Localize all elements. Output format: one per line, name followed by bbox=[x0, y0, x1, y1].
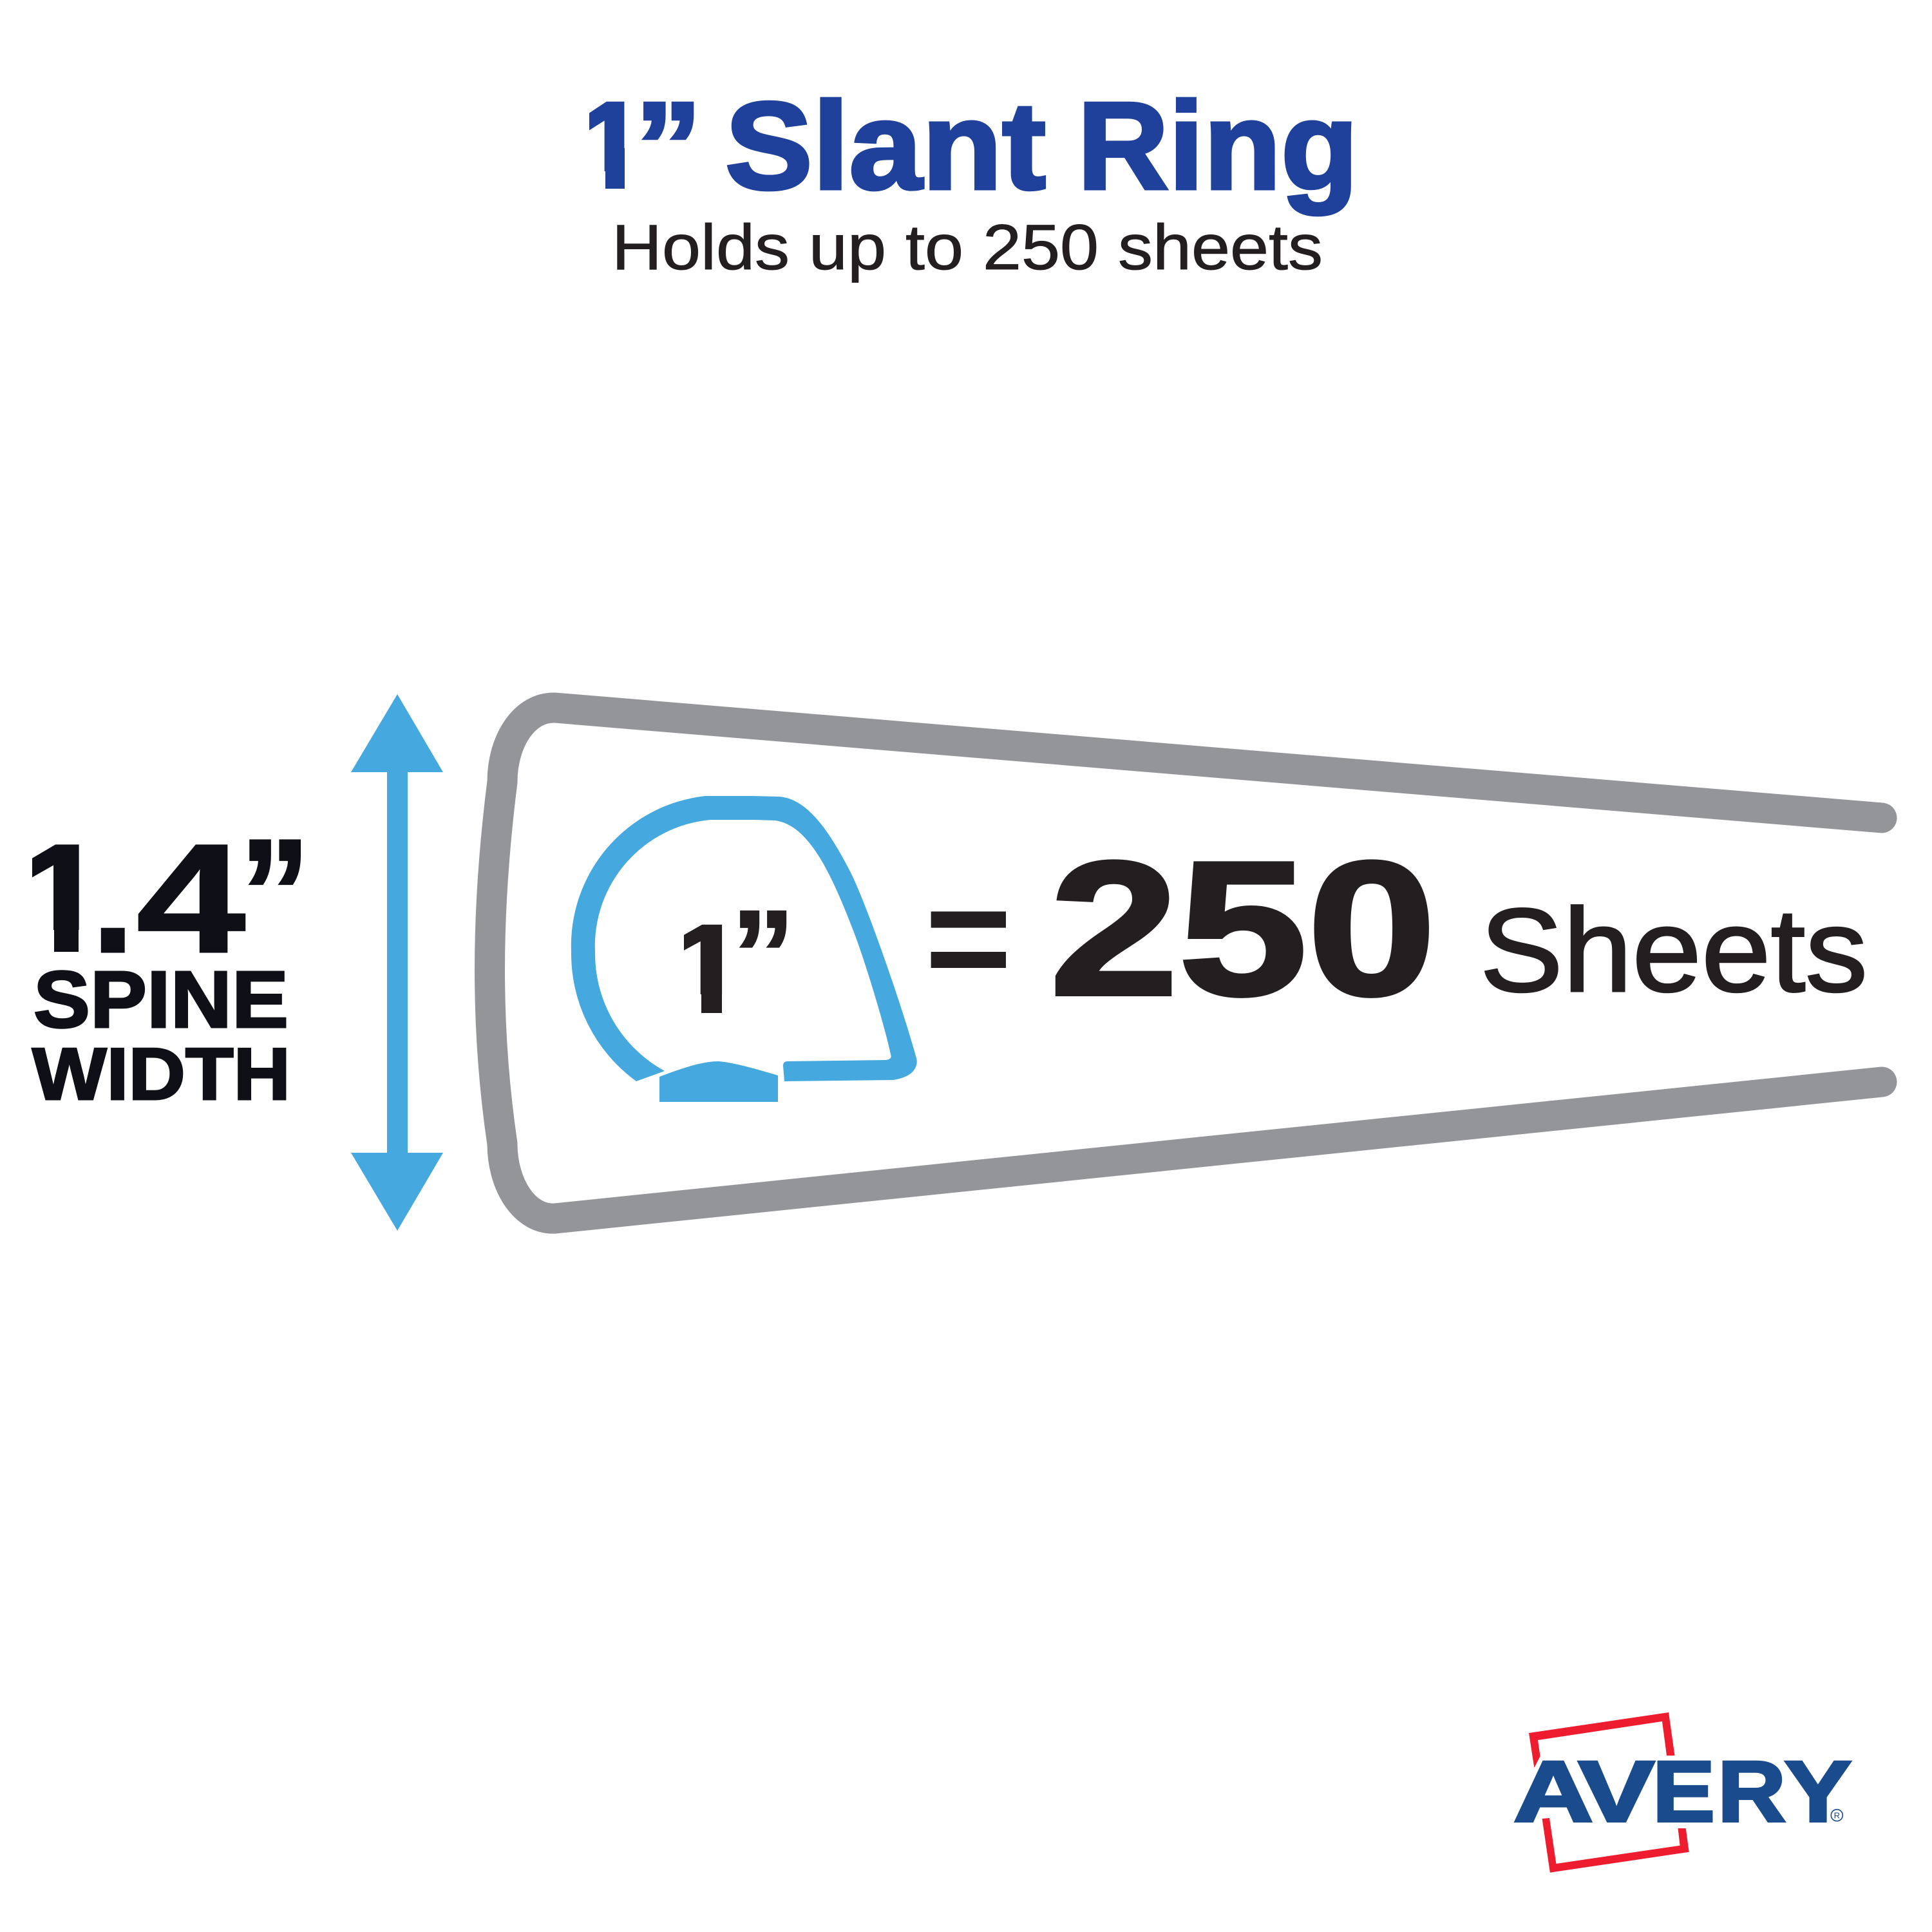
title: Slant bbox=[725, 76, 1046, 215]
logo wordmark bbox=[1513, 1744, 1852, 1840]
spine width label bbox=[6, 807, 310, 1115]
subtitle: Holds up to 250 sheets bbox=[612, 211, 1323, 283]
registered mark: R bbox=[1834, 1811, 1840, 1820]
spine width value: . bbox=[91, 812, 135, 985]
equals sign: = bbox=[925, 855, 1012, 1021]
title bbox=[567, 76, 1358, 215]
logo frame top bbox=[1529, 1712, 1674, 1768]
logo wordmark: E bbox=[1653, 1744, 1715, 1840]
double-headed arrow bbox=[351, 694, 443, 1231]
sheet count: 250 bbox=[1050, 822, 1436, 1035]
ring base bbox=[659, 1061, 778, 1102]
logo wordmark: V bbox=[1578, 1744, 1654, 1840]
spine width value: ” bbox=[240, 807, 310, 980]
logo wordmark: R bbox=[1718, 1744, 1786, 1840]
spine label: SPINE bbox=[33, 955, 289, 1045]
spine width value bbox=[6, 807, 310, 985]
width label: WIDTH bbox=[32, 1034, 290, 1115]
avery logo bbox=[1513, 1712, 1852, 1873]
registered mark bbox=[1831, 1810, 1842, 1821]
ring size digit: 1 bbox=[667, 898, 748, 1040]
slant ring icon bbox=[571, 796, 917, 1102]
ring size inch mark: ” bbox=[731, 884, 795, 1026]
logo wordmark: Y bbox=[1785, 1744, 1852, 1840]
logo wordmark: A bbox=[1513, 1744, 1593, 1840]
spine width value: 1 bbox=[15, 812, 109, 985]
logo frame bottom bbox=[1542, 1818, 1689, 1873]
title: Ring bbox=[1077, 76, 1358, 215]
title: 1 bbox=[578, 76, 645, 215]
spine width value: 4 bbox=[137, 812, 245, 985]
sheets label: Sheets bbox=[1480, 884, 1868, 1016]
ring arc bbox=[571, 796, 917, 1081]
ring size label bbox=[660, 884, 795, 1040]
title: ” bbox=[635, 76, 702, 215]
binder outline bbox=[489, 708, 1882, 1218]
